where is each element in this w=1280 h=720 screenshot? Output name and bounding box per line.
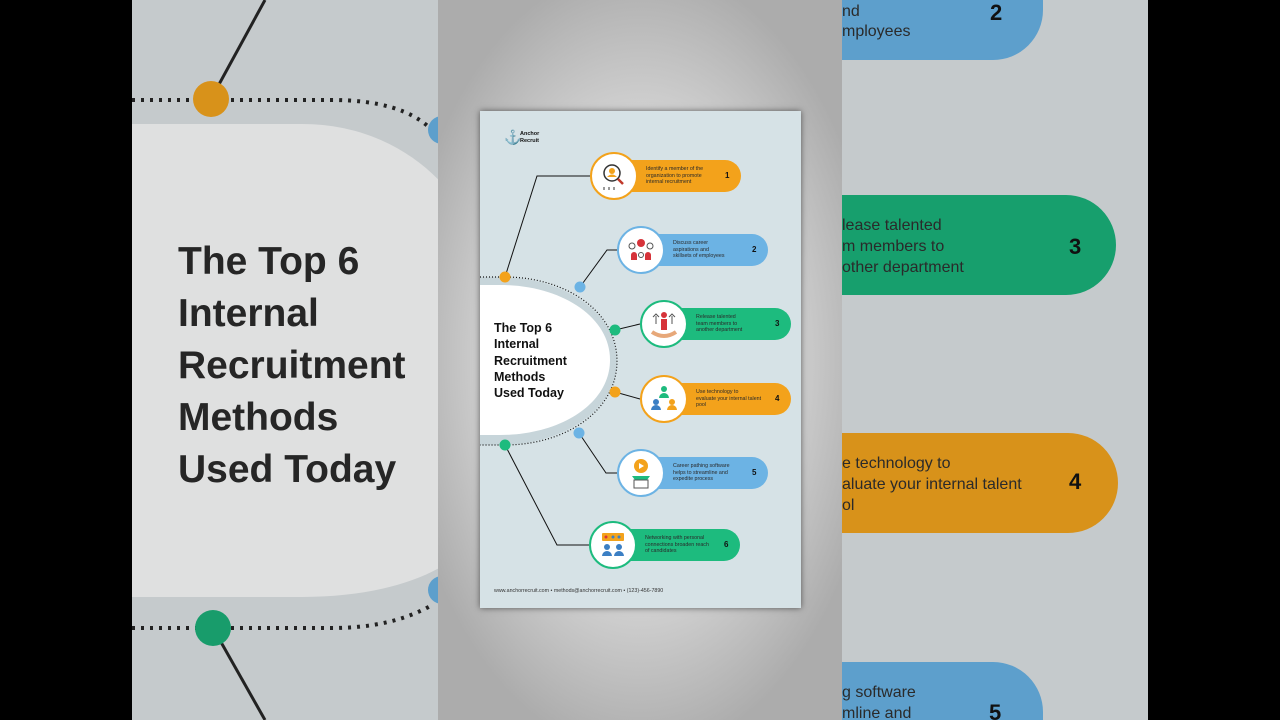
left panel title (178, 240, 406, 491)
logo: Recruit (520, 138, 539, 144)
left panel title: The Top 6 (178, 240, 359, 283)
item 3: team members to (696, 321, 737, 327)
center backdrop (438, 0, 842, 720)
right pill 5: g software (842, 684, 916, 701)
panel title background shape (132, 124, 472, 597)
right pill 5 (782, 662, 1043, 720)
hub graphic (480, 176, 640, 546)
title: Internal (494, 337, 539, 351)
icon 5 (617, 449, 665, 497)
footer: www.anchorrecruit.com • methods@anchorrecruit.com • (123)-456-7890 (494, 588, 663, 594)
item 5: 5 (752, 468, 756, 477)
item 5: helps to streamline and (673, 470, 728, 476)
item 2: Discuss career (673, 240, 708, 246)
right pill 3: m members to (842, 238, 944, 255)
item 1: internal recruitment (646, 179, 691, 185)
left blurred panel (132, 0, 438, 720)
item 3: another department (696, 327, 742, 333)
item 1: Identify a member of the (646, 166, 703, 172)
right blurred panel (842, 0, 1148, 720)
item 2: skillsets of employees (673, 253, 725, 259)
icon 2 (617, 226, 665, 274)
right pill 2 (782, 0, 1043, 60)
right pill 4: 4 (1069, 469, 1081, 494)
item 3 (640, 300, 791, 348)
left panel title: Internal (178, 292, 319, 335)
title: Used Today (494, 386, 564, 400)
item 4: evaluate your internal talent (696, 396, 761, 402)
right pill 4: ol (842, 497, 854, 514)
item 4: 4 (775, 394, 779, 403)
item 2: aspirations and (673, 247, 709, 253)
item 3: Release talented (696, 314, 736, 320)
right pill 2: nd (842, 3, 860, 20)
left panel title: Methods (178, 396, 338, 439)
item 4: Use technology to (696, 389, 738, 395)
item 1: organization to promote (646, 173, 702, 179)
item 6: Networking with personal (645, 535, 704, 541)
icon 4 (640, 375, 688, 423)
logo: Anchor (520, 131, 539, 137)
right pill 3 (782, 195, 1116, 295)
logo: ⚓ (504, 129, 521, 145)
right pill 4: e technology to (842, 455, 951, 472)
right pill 3: other department (842, 259, 964, 276)
right pill 3: lease talented (842, 217, 942, 234)
item 6: connections broaden reach (645, 542, 709, 548)
item 4 (640, 375, 791, 423)
title: Methods (494, 370, 545, 384)
item 2: 2 (752, 245, 756, 254)
item 6: 6 (724, 540, 728, 549)
item 4: pool (696, 402, 706, 408)
item 5: Career pathing software (673, 463, 730, 469)
item 6: of candidates (645, 548, 677, 554)
item 5: expedite process (673, 476, 713, 482)
left panel title: Used Today (178, 448, 396, 491)
title: The Top 6 (494, 321, 552, 335)
item 5 (617, 449, 768, 497)
title (494, 321, 567, 400)
right pill 4: aluate your internal talent (842, 476, 1022, 493)
icon 1 (590, 152, 638, 200)
right pill 2: 2 (990, 0, 1002, 25)
item 2 (617, 226, 768, 274)
right pill 3: 3 (1069, 234, 1081, 259)
infographic card (480, 111, 801, 608)
logo (504, 129, 540, 145)
item 1 (590, 152, 741, 200)
left panel title: Recruitment (178, 344, 406, 387)
right pill 2: mployees (842, 23, 910, 40)
item 1: 1 (725, 171, 729, 180)
item 3: 3 (775, 319, 779, 328)
item 6 (589, 521, 740, 569)
title: Recruitment (494, 354, 567, 368)
icon 6 (589, 521, 637, 569)
icon 3 (640, 300, 688, 348)
right pill 4 (782, 433, 1118, 533)
